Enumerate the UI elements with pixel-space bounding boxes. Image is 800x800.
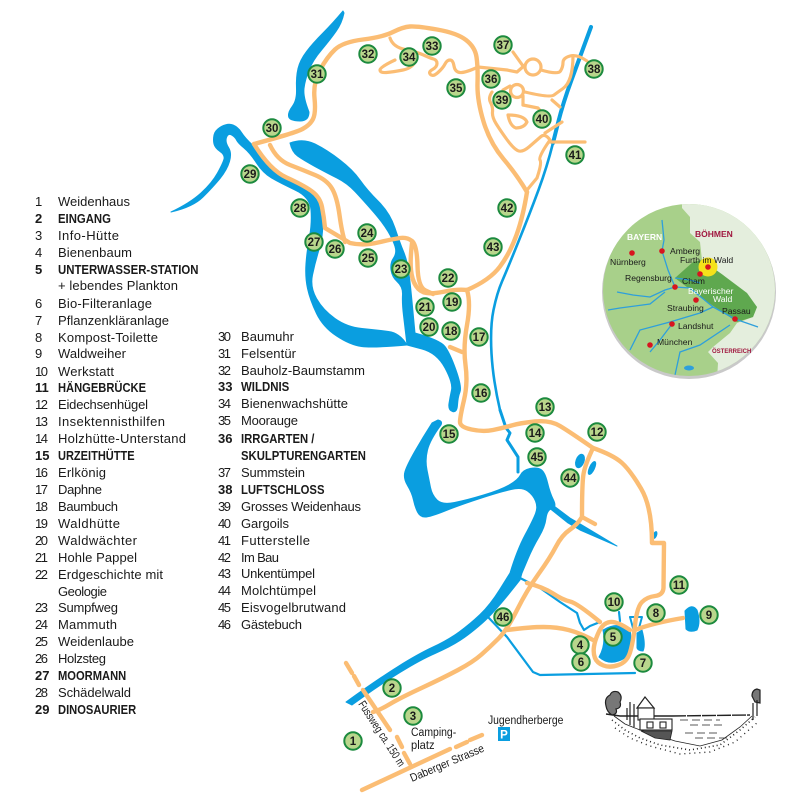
- connecting paths: [254, 144, 683, 640]
- marker 6: 6: [578, 657, 584, 669]
- marker 16: 16: [475, 388, 487, 400]
- marker 14: [526, 424, 544, 442]
- label: Fussweg: Fussweg ca. 150 m: [355, 699, 407, 769]
- marker 27: [305, 233, 323, 251]
- row 44: Molchtümpel: [241, 583, 316, 598]
- map labels: ÖSTERREICH: [712, 348, 751, 355]
- row 1: Weidenhaus: [58, 194, 130, 209]
- row 40: 40: [218, 516, 231, 531]
- row 16: 16: [35, 465, 48, 480]
- row 10: Werkstatt: [58, 364, 114, 379]
- marker 17: [470, 328, 488, 346]
- row 14: Holzhütte-Unterstand: [58, 431, 186, 446]
- row 30: Baumuhr: [241, 329, 295, 344]
- row 34: Bienenwachshütte: [241, 396, 348, 411]
- row 23: Sumpfweg: [58, 600, 118, 615]
- row 21: 21: [35, 550, 48, 565]
- marker 38: 38: [588, 64, 601, 76]
- marker 7: [634, 654, 652, 672]
- row 33: 33: [218, 379, 232, 394]
- marker 1: [344, 732, 362, 750]
- wedge stream: [548, 503, 617, 546]
- cross-section illustration: [606, 689, 760, 754]
- lake near 31: [288, 11, 344, 121]
- row 7: Pflanzenkläranlage: [58, 313, 169, 328]
- label: Camping-platz: [411, 726, 456, 752]
- numbered map markers: [241, 36, 718, 750]
- map labels: Furth im Wald: [680, 255, 733, 265]
- row 27: 27: [35, 668, 49, 683]
- row 44: 44: [218, 583, 231, 598]
- marker 4: 4: [577, 640, 584, 652]
- marker 4: [571, 636, 589, 654]
- marker 24: 24: [361, 228, 374, 240]
- row 12: 12: [35, 397, 48, 412]
- row 22: 22: [35, 567, 48, 582]
- row 40: [218, 516, 290, 531]
- row 45: 45: [218, 600, 231, 615]
- marker 35: 35: [450, 83, 463, 95]
- row 21: Hohle Pappel: [58, 550, 137, 565]
- marker 19: 19: [446, 297, 458, 309]
- thin river east: [491, 27, 591, 472]
- row 17: [35, 482, 102, 497]
- location labels: [355, 699, 563, 785]
- southern main path: [373, 448, 593, 712]
- row 22: Erdgeschichte mit: [58, 567, 163, 582]
- marker 46: [494, 608, 512, 626]
- row 33: WILDNIS: [241, 379, 289, 394]
- marker 37: [494, 36, 512, 54]
- row 5: 5: [35, 262, 42, 277]
- row 5 continued: + lebendes Plankton: [58, 278, 178, 293]
- map labels: Wald: [713, 294, 732, 304]
- marker 41: [566, 146, 584, 164]
- row 43: 43: [218, 566, 231, 581]
- row 2: EINGANG: [58, 211, 111, 226]
- marker 46: 46: [497, 612, 509, 624]
- marker 5: [604, 628, 622, 646]
- row 15: 15: [35, 448, 49, 463]
- footpath and roads: [346, 663, 482, 790]
- marker 38: [585, 60, 603, 78]
- row 46: Gästebuch: [241, 617, 302, 632]
- row 26: [35, 651, 106, 666]
- row 26: Holzsteg: [58, 651, 106, 666]
- row 1: 1: [35, 194, 42, 209]
- marker 39: 39: [496, 95, 508, 107]
- marker 32: 32: [362, 49, 374, 61]
- marker 28: 28: [294, 203, 307, 215]
- marker 44: 44: [564, 473, 577, 485]
- map labels: Bayerischer: [688, 286, 734, 296]
- marker 41: 41: [569, 150, 582, 162]
- marker 31: [308, 65, 326, 83]
- label: Jugendherberge: Jugendherberge: [488, 715, 563, 727]
- marker 34: [400, 48, 418, 66]
- row 39: Grosses Weidenhaus: [241, 499, 362, 514]
- row 36: SKULPTURENGARTEN: [241, 448, 366, 463]
- row 39: 39: [218, 499, 231, 514]
- row 36: 36: [218, 431, 232, 446]
- marker 9: 9: [706, 610, 712, 622]
- row 27: MOORMANN: [58, 668, 126, 683]
- marker 36: 36: [485, 74, 497, 86]
- marker 21: 21: [419, 302, 432, 314]
- marker 26: [326, 240, 344, 258]
- row 28: 28: [35, 685, 48, 700]
- row 25: Weidenlaube: [58, 634, 134, 649]
- marker 25: 25: [362, 253, 375, 265]
- marker 25: [359, 249, 377, 267]
- row 4: Bienenbaum: [58, 245, 132, 260]
- row 13: 13: [35, 414, 48, 429]
- marker 5: 5: [610, 632, 617, 644]
- marker 14: 14: [529, 428, 542, 440]
- row 20: Waldwächter: [58, 533, 138, 548]
- marker 43: [484, 238, 502, 256]
- marker 20: [420, 318, 438, 336]
- row 24: Mammuth: [58, 617, 117, 632]
- row 22: [35, 567, 163, 599]
- row 6: Bio-Filteranlage: [58, 296, 152, 311]
- row 4: 4: [35, 245, 42, 260]
- row 29: DINOSAURIER: [58, 702, 136, 717]
- river channel from 29 via 27: [171, 124, 407, 347]
- marker 15: [440, 425, 458, 443]
- marker 33: [423, 37, 441, 55]
- row 28: Schädelwald: [58, 685, 131, 700]
- marker 8: 8: [653, 608, 660, 620]
- row 25: 25: [35, 634, 48, 649]
- marker 1: 1: [350, 736, 357, 748]
- row 43: Unkentümpel: [241, 566, 315, 581]
- marker 22: [439, 269, 457, 287]
- row 38: 38: [218, 482, 232, 497]
- row 32: 32: [218, 363, 231, 378]
- inset locator map: [602, 200, 780, 380]
- marker 9: [700, 606, 718, 624]
- marker 18: 18: [445, 326, 458, 338]
- map labels: Straubing: [667, 303, 704, 313]
- row 46: 46: [218, 617, 231, 632]
- marker 16: [472, 384, 490, 402]
- row 31: [218, 346, 297, 361]
- marker 43: 43: [487, 242, 499, 254]
- row 3: 3: [35, 228, 42, 243]
- row 23: 23: [35, 600, 48, 615]
- map labels: Cham: [682, 276, 705, 286]
- row 13: Insektennisthilfen: [58, 414, 165, 429]
- row 17: Daphne: [58, 482, 102, 497]
- label: Daberger Strasse: Daberger Strasse: [408, 742, 486, 785]
- marker 13: 13: [539, 402, 551, 414]
- row 18: 18: [35, 499, 48, 514]
- main path loop: [254, 26, 664, 667]
- marker 12: 12: [591, 427, 603, 439]
- row 42: 42: [218, 550, 231, 565]
- marker 27: 27: [308, 237, 320, 249]
- map labels: Passau: [722, 306, 751, 316]
- marker 20: 20: [423, 322, 435, 334]
- marker 19: [443, 293, 461, 311]
- row 5: UNTERWASSER-STATION: [58, 262, 199, 277]
- row 7: 7: [35, 313, 42, 328]
- row 42: [218, 550, 279, 565]
- row 30: 30: [218, 329, 231, 344]
- label: Camping-platz: Camping-: [411, 726, 456, 739]
- marker 32: [359, 45, 377, 63]
- row 26: 26: [35, 651, 48, 666]
- icon: parking: P: [500, 730, 508, 742]
- row 40: Gargoils: [241, 516, 290, 531]
- marker 24: [358, 224, 376, 242]
- row 11: 11: [35, 380, 49, 395]
- marker 29: [241, 165, 259, 183]
- map labels: BÖHMEN: [695, 229, 733, 239]
- marker 18: [442, 322, 460, 340]
- marker 30: 30: [266, 123, 278, 135]
- river channel via 23: [290, 141, 460, 412]
- map labels: Regensburg: [625, 273, 672, 283]
- row 45: Eisvogelbrutwand: [241, 600, 346, 615]
- yellow highlight: [698, 258, 718, 276]
- row 22: Geologie: [58, 584, 107, 599]
- map labels: BAYERN: [627, 232, 662, 242]
- marker 44: [561, 469, 579, 487]
- row 16: Erlkönig: [58, 465, 106, 480]
- marker 28: [291, 199, 309, 217]
- marker 36: [482, 70, 500, 88]
- label: Camping-platz: platz: [411, 740, 435, 752]
- row 19: 19: [35, 516, 48, 531]
- row 12: Eidechsenhügel: [58, 397, 148, 412]
- ponds and thin streams: [488, 453, 699, 675]
- marker 42: 42: [501, 203, 513, 215]
- row 36: IRRGARTEN /: [241, 431, 315, 446]
- row 36: [218, 431, 366, 463]
- row 17: 17: [35, 482, 48, 497]
- row 38: LUFTSCHLOSS: [241, 482, 324, 497]
- row 41: 41: [218, 533, 231, 548]
- row 31: Felsentür: [241, 346, 297, 361]
- row 41: Futterstelle: [241, 533, 310, 548]
- row 16: [35, 465, 106, 480]
- row 42: Im Bau: [241, 550, 279, 565]
- legend column 2: [218, 329, 366, 632]
- marker 40: [533, 110, 551, 128]
- row 24: 24: [35, 617, 48, 632]
- row 19: Waldhütte: [58, 516, 120, 531]
- row 10: 10: [35, 364, 48, 379]
- icon: parking: [498, 727, 510, 742]
- row 35: Moorauge: [241, 413, 298, 428]
- map labels: München: [657, 337, 693, 347]
- row 8: Kompost-Toilette: [58, 330, 158, 345]
- marker 6: [572, 653, 590, 671]
- marker 8: [647, 604, 665, 622]
- path network: [254, 26, 683, 790]
- marker 22: 22: [442, 273, 454, 285]
- marker 37: 37: [497, 40, 509, 52]
- map labels: [610, 229, 751, 355]
- row 37: 37: [218, 465, 231, 480]
- marker 42: [498, 199, 516, 217]
- marker 11: 11: [673, 580, 686, 592]
- row 9: Waldweiher: [58, 346, 127, 361]
- city dots: [629, 248, 738, 348]
- marker 26: 26: [329, 244, 341, 256]
- legend column 1: [35, 194, 199, 717]
- marker 11: [670, 576, 688, 594]
- row 35: 35: [218, 413, 231, 428]
- row 14: 14: [35, 431, 48, 446]
- marker 35: [447, 79, 465, 97]
- marker 10: 10: [608, 597, 620, 609]
- row 11: HÄNGEBRÜCKE: [58, 379, 146, 395]
- marker 33: 33: [426, 41, 438, 53]
- marker 3: [404, 707, 422, 725]
- row 30: [218, 329, 295, 344]
- marker 13: [536, 398, 554, 416]
- row 15: URZEITHÜTTE: [58, 447, 135, 463]
- marker 2: [383, 679, 401, 697]
- row 3: Info-Hütte: [58, 228, 119, 243]
- marker 10: [605, 593, 623, 611]
- marker 34: 34: [403, 52, 416, 64]
- central lake: [346, 420, 555, 705]
- marker 2: 2: [389, 683, 395, 695]
- row 2: 2: [35, 211, 42, 226]
- row 8: 8: [35, 330, 42, 345]
- map labels: Nürnberg: [610, 257, 646, 267]
- row 2: [35, 211, 111, 226]
- marker 30: [263, 119, 281, 137]
- marker 3: 3: [410, 711, 416, 723]
- row 29: 29: [35, 702, 49, 717]
- marker 17: 17: [473, 332, 485, 344]
- marker 21: [416, 298, 434, 316]
- row 34: 34: [218, 396, 231, 411]
- marker 23: 23: [395, 264, 407, 276]
- marker 12: [588, 423, 606, 441]
- marker 15: 15: [443, 429, 456, 441]
- row 33: [218, 379, 289, 394]
- row 37: Summstein: [241, 465, 305, 480]
- water bodies: [171, 11, 699, 705]
- woodland trails: [380, 38, 587, 190]
- row 9: 9: [35, 346, 42, 361]
- row 31: 31: [218, 346, 231, 361]
- row 20: 20: [35, 533, 48, 548]
- marker 45: 45: [531, 452, 544, 464]
- marker 39: [493, 91, 511, 109]
- marker 45: [528, 448, 546, 466]
- marker 40: 40: [536, 114, 548, 126]
- row 6: 6: [35, 296, 42, 311]
- marker 31: 31: [311, 69, 324, 81]
- map labels: Amberg: [670, 246, 700, 256]
- marker 29: 29: [244, 169, 256, 181]
- row 32: Bauholz-Baumstamm: [241, 363, 365, 378]
- marker 23: [392, 260, 410, 278]
- row 18: Baumbuch: [58, 499, 118, 514]
- map labels: Landshut: [678, 321, 714, 331]
- marker 7: 7: [640, 658, 646, 670]
